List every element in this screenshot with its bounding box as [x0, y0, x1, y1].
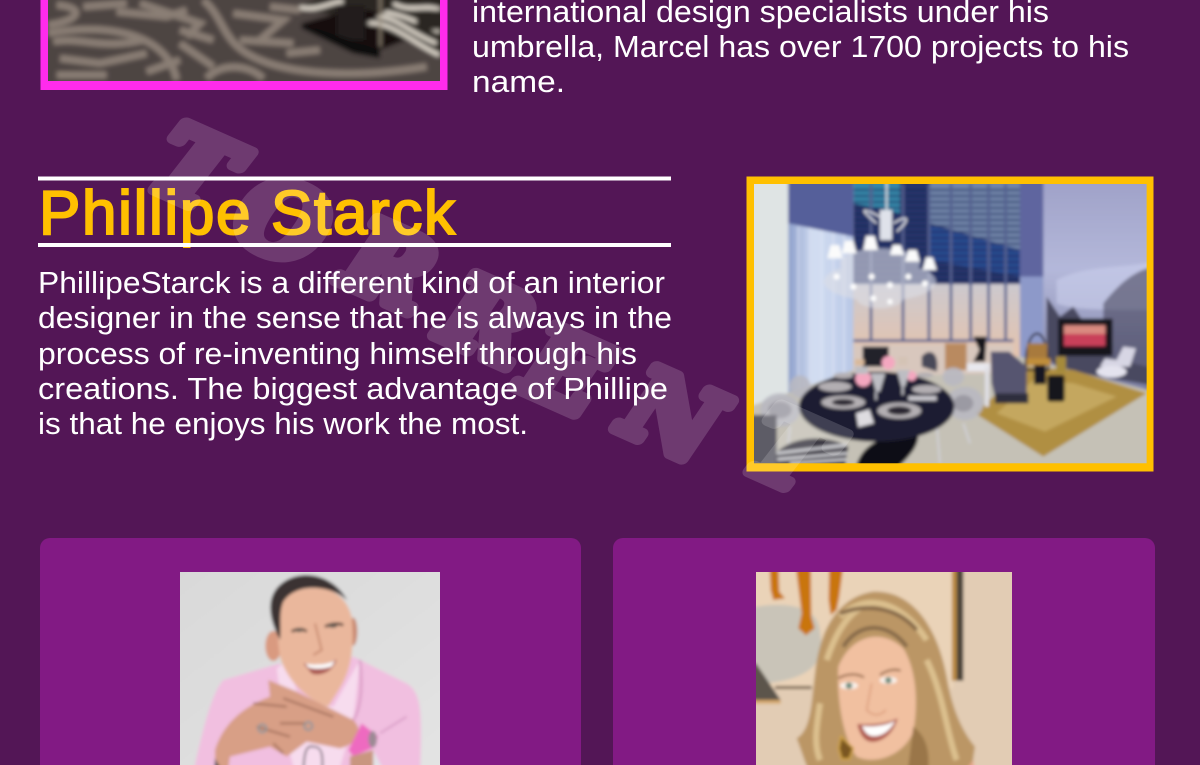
text block: Phillipe Starck description: designer in the sense that he is always in the: [38, 300, 672, 335]
watermark: TORRENT: R: [318, 199, 462, 333]
panel: left designer card: [40, 538, 581, 765]
text block: Phillipe Starck description: process of re-inventing himself through his: [38, 336, 637, 371]
panel: right designer card: [613, 538, 1155, 765]
text block: Marcel Wanders intro: name.: [472, 64, 565, 99]
watermark: TORRENT: T: [123, 106, 266, 232]
text block: Phillipe Starck description: [38, 265, 672, 441]
text block: Phillipe Starck description: PhillipeStarck is a different kind of an interior: [38, 265, 665, 300]
watermark: TORRENT: E: [496, 305, 633, 436]
text block: Marcel Wanders intro: [472, 0, 1129, 99]
text block: Phillipe Starck description: is that he enjoys his work the most.: [38, 406, 528, 441]
heading: Phillipe Starck: Phillipe Starck: [39, 179, 456, 248]
photo: smiling woman with blonde hair: [756, 572, 1012, 765]
text block: Marcel Wanders intro: umbrella, Marcel has over 1700 projects to his: [472, 29, 1129, 64]
image: patterned carpet in pink frame: [33, 0, 453, 93]
watermark: TORRENT: R: [416, 254, 560, 388]
image: Starck dining room in gold frame: [740, 170, 1160, 477]
watermark: TORRENT: O: [209, 153, 356, 288]
watermark: TORRENT: [123, 106, 861, 514]
watermark: TORRENT: T: [718, 388, 861, 514]
photo: man in pink jacket: [180, 572, 440, 765]
heading: Phillipe Starck: [38, 176, 671, 248]
text block: Phillipe Starck description: creations. The biggest advantage of Phillipe: [38, 371, 668, 406]
watermark: TORRENT: N: [597, 347, 748, 484]
